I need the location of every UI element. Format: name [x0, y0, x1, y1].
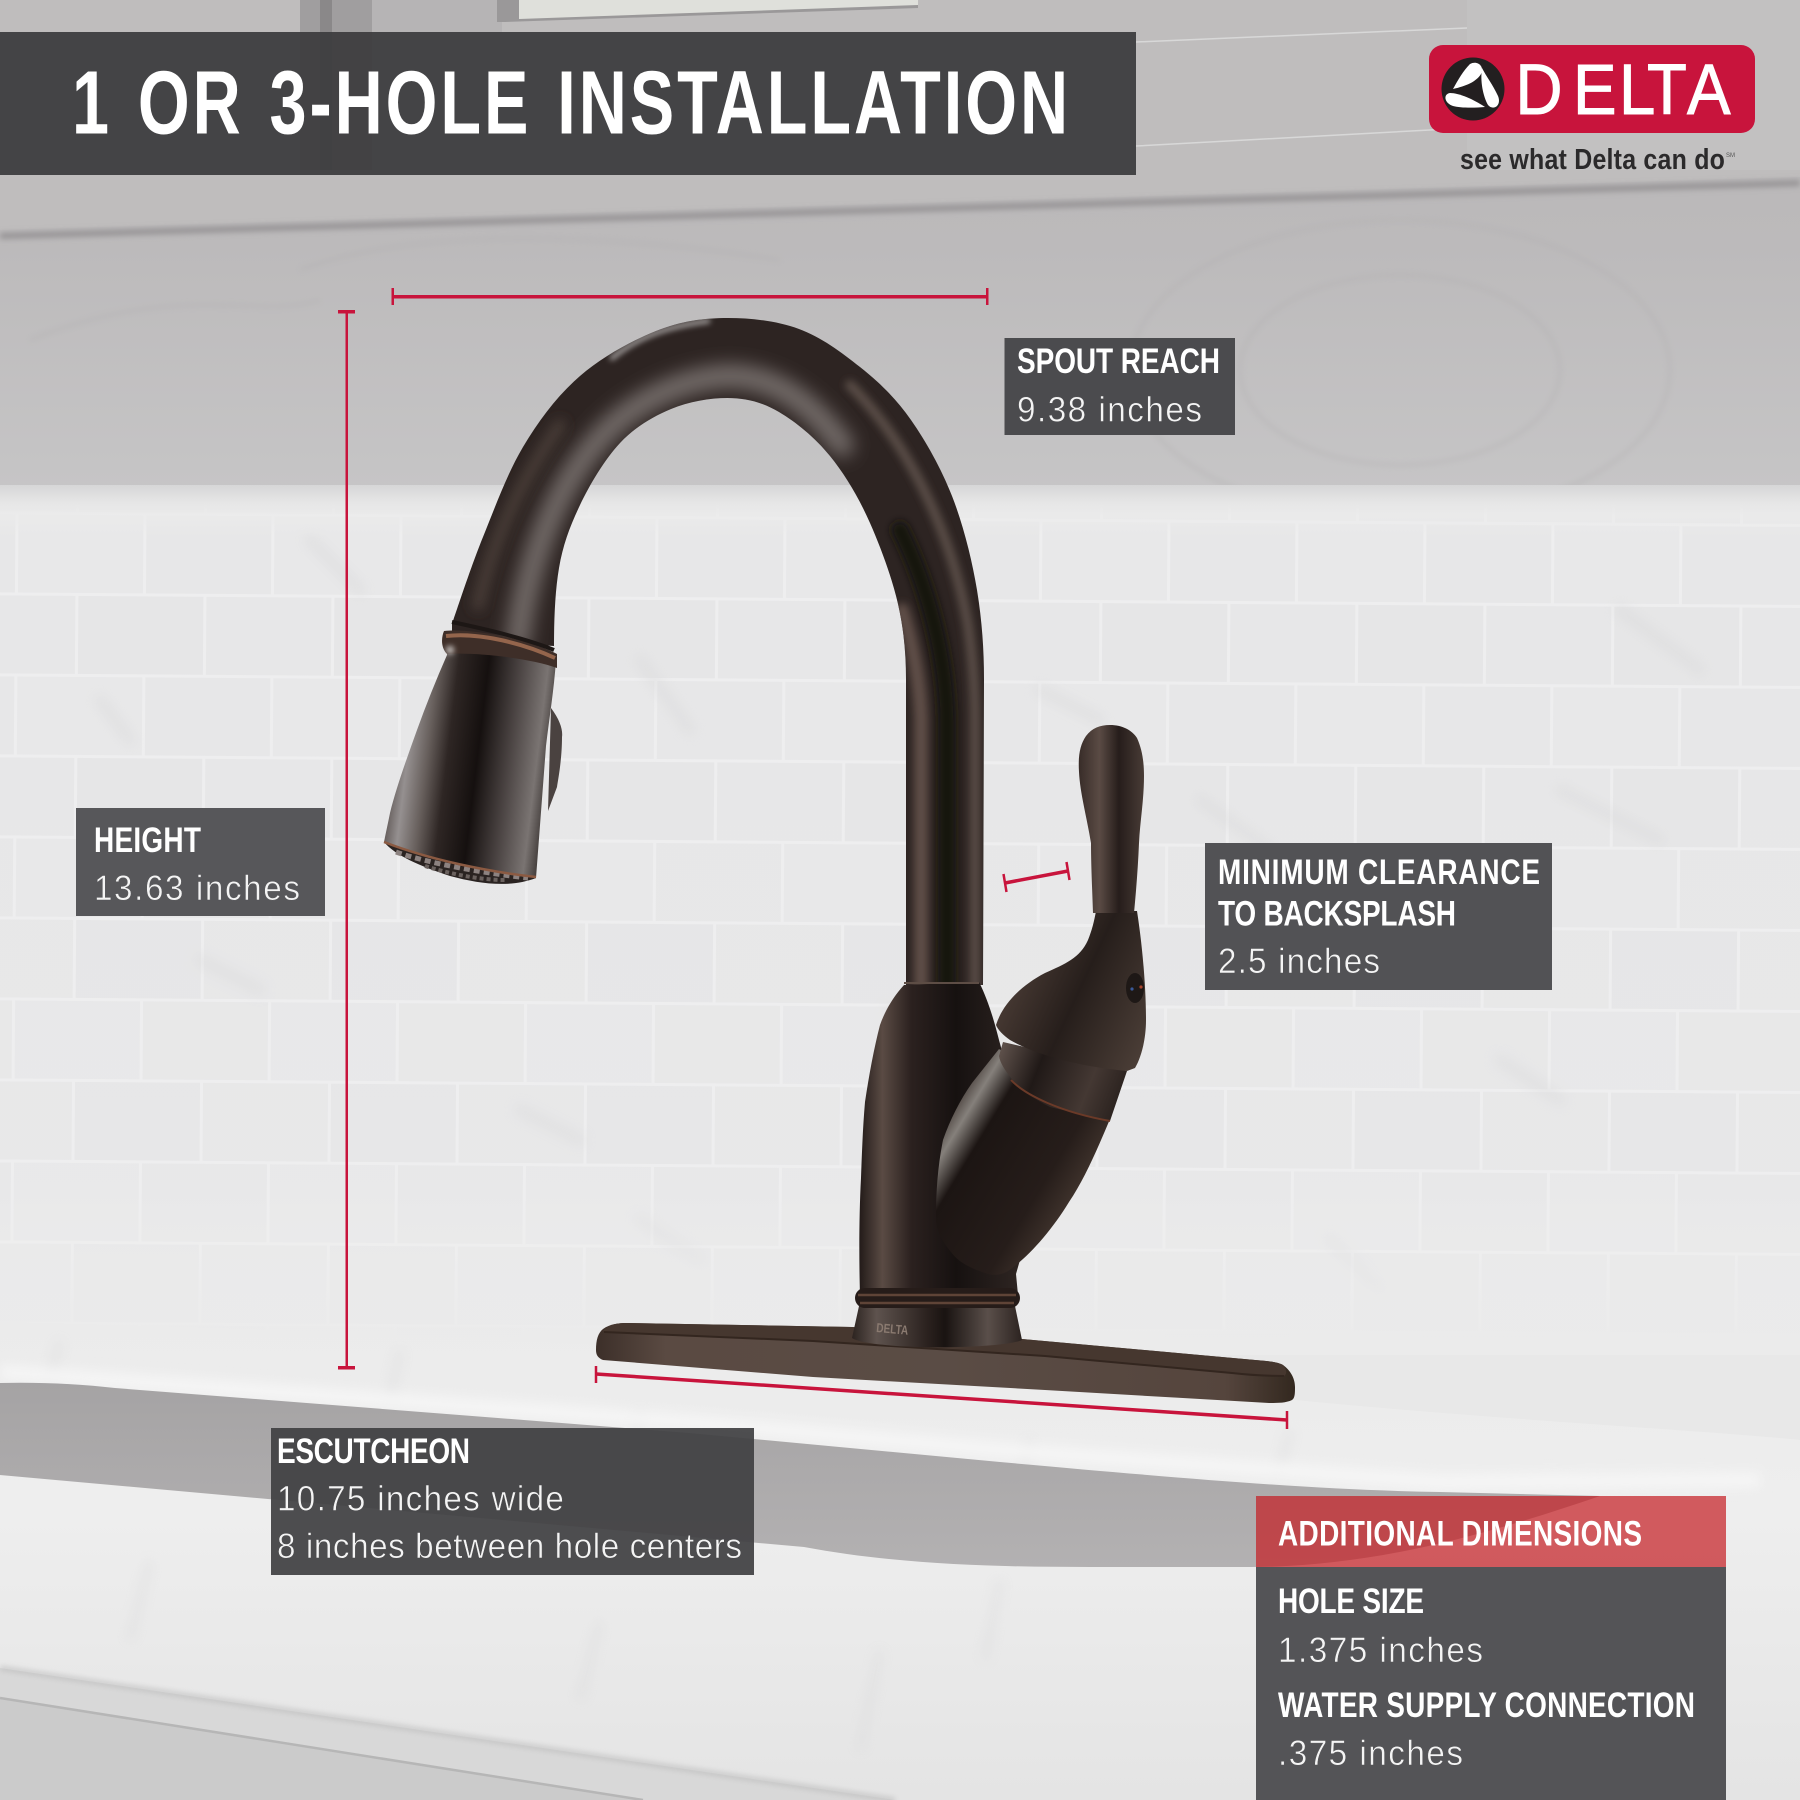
panel header: ADDITIONAL DIMENSIONS — [1278, 1513, 1642, 1553]
title banner: 1 OR 3-HOLE INSTALLATION — [72, 52, 1068, 153]
panel: additional dimensions — [1256, 1496, 1726, 1800]
pull-down spray head — [384, 622, 562, 884]
callout: escutcheon: 10.75 inches wide — [277, 1480, 564, 1519]
callout: escutcheon: 8 inches between hole centers — [277, 1527, 742, 1566]
marble tile wall — [0, 485, 1800, 1355]
dimension line: spout reach — [392, 288, 988, 305]
panel body: .375 inches — [1278, 1734, 1463, 1773]
dimension line: escutcheon width — [596, 1366, 1287, 1429]
callout: escutcheon: ESCUTCHEON — [277, 1431, 470, 1471]
dimension line: height — [338, 310, 355, 1370]
base ring and flange — [852, 1288, 1022, 1347]
callout: minimum clearance: 2.5 inches — [1218, 942, 1380, 981]
valve body — [936, 1049, 1110, 1275]
callout: spout reach — [1004, 338, 1235, 435]
Delta logo: SM — [1726, 153, 1735, 159]
callout: spout reach: SPOUT REACH — [1017, 341, 1220, 381]
callout: minimum clearance — [1205, 843, 1552, 990]
escutcheon plate — [596, 1323, 1295, 1403]
panel body: 1.375 inches — [1278, 1631, 1483, 1670]
countertop — [0, 1322, 1800, 1800]
lever handle — [1079, 725, 1144, 913]
callout: minimum clearance: MINIMUM CLEARANCE — [1218, 852, 1540, 892]
icon: Delta triangle mark — [1442, 58, 1504, 120]
Delta logo: see what Delta can do — [1460, 143, 1725, 175]
Delta logo — [1429, 45, 1755, 175]
valve band — [999, 1042, 1127, 1121]
callout: height: HEIGHT — [94, 820, 202, 860]
faucet — [384, 318, 1295, 1403]
base ring and flange: DELTA — [876, 1320, 909, 1338]
callout: spout reach: 9.38 inches — [1017, 391, 1202, 430]
sink basin — [0, 1383, 1600, 1567]
dimension line: backsplash clearance — [1004, 862, 1070, 892]
panel header — [1256, 1496, 1726, 1567]
panel body — [1256, 1567, 1726, 1800]
faucet body — [859, 982, 1040, 1295]
callout: height: 13.63 inches — [94, 869, 300, 908]
panel body: HOLE SIZE — [1278, 1581, 1424, 1621]
Delta logo: DELTA — [1515, 51, 1731, 130]
callout: minimum clearance: TO BACKSPLASH — [1218, 893, 1456, 933]
front counter edge and cabinet — [0, 1668, 895, 1800]
collar ring — [442, 622, 557, 668]
wood cabinet panel — [0, 0, 1800, 520]
handle cap — [996, 911, 1146, 1071]
panel body: WATER SUPPLY CONNECTION — [1278, 1685, 1695, 1725]
spray face — [384, 842, 536, 884]
callout: height — [76, 808, 325, 916]
callout: escutcheon — [271, 1428, 754, 1575]
title banner — [0, 32, 1136, 175]
spout gooseneck — [452, 318, 984, 990]
